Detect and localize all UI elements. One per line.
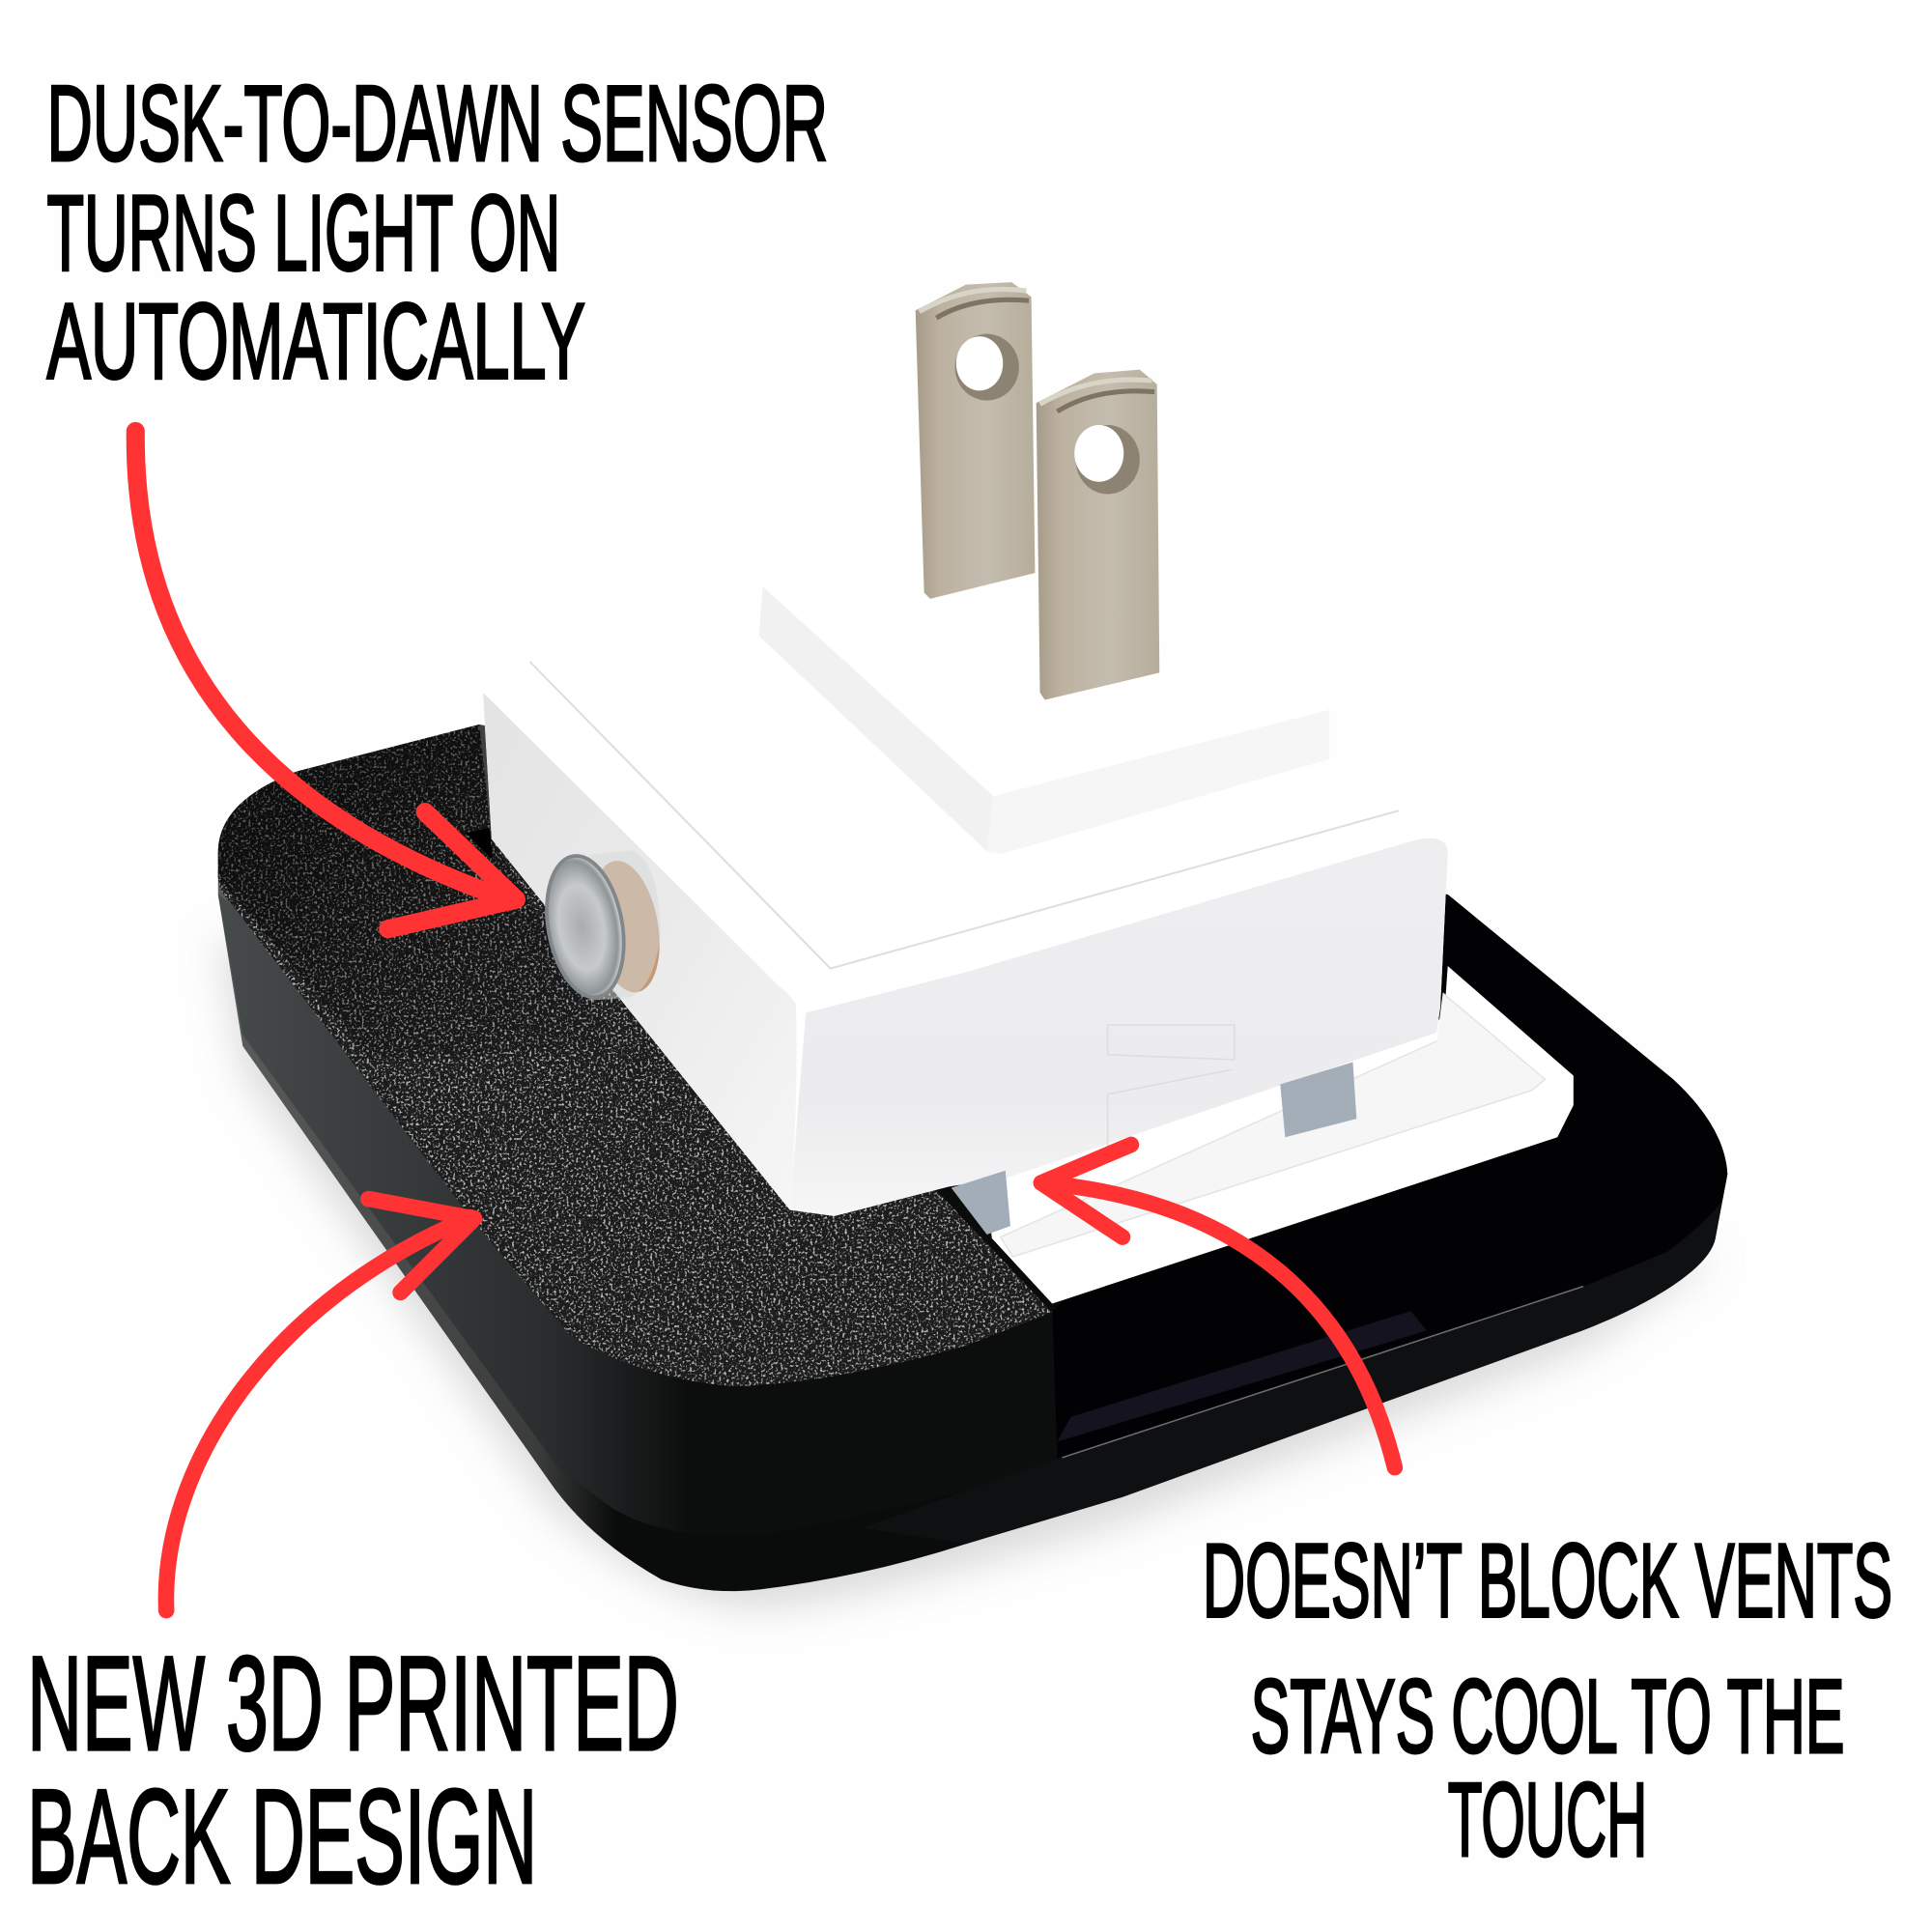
- gap shadow next to body: [466, 828, 493, 860]
- front prong: [1037, 370, 1159, 699]
- front prong hole: [1076, 425, 1140, 494]
- acrylic base plate: [218, 724, 1727, 1591]
- callout: new 3D printed back design: BACK DESIGN: [27, 1762, 537, 1912]
- arrow: sensor: [135, 431, 516, 929]
- acrylic front lip: [863, 1200, 1722, 1544]
- callout: vents and cool touch: [1203, 1521, 1892, 1878]
- body front right face: [790, 838, 1448, 1216]
- printed back textured top: [218, 724, 1052, 1386]
- front vent slot: [952, 1171, 1010, 1235]
- plug base top: [763, 577, 1329, 796]
- body silhouette underlay: [482, 589, 1448, 1216]
- white tray: [985, 966, 1574, 1303]
- product shadow: [218, 936, 1716, 1608]
- callout: dusk-to-dawn sensor: [46, 64, 828, 402]
- rear prong hole: [955, 334, 1019, 401]
- top face seam: [529, 662, 1399, 969]
- plug base: [759, 577, 1329, 854]
- sensor lens cap: [589, 850, 661, 1001]
- rear prong: [916, 282, 1035, 599]
- callout: new 3D printed back design: NEW 3D PRINTED: [27, 1629, 679, 1778]
- sensor lens: [536, 850, 634, 1004]
- callout: vents and cool touch: TOUCH: [1448, 1761, 1647, 1878]
- sensor lens copper: [582, 856, 669, 998]
- acrylic lip highlight: [1062, 1287, 1583, 1458]
- product photo: plug-in night light on base: [218, 282, 1727, 1591]
- arrow: back design: [166, 1199, 474, 1610]
- acrylic top surface: [1052, 895, 1727, 1459]
- embossed rectangle mark: [1108, 1025, 1235, 1146]
- callout: dusk-to-dawn sensor: DUSK-TO-DAWN SENSOR: [46, 64, 828, 184]
- callout: new 3D printed back design: [27, 1629, 679, 1912]
- callout: dusk-to-dawn sensor: AUTOMATICALLY: [46, 282, 585, 402]
- rear vent slot: [1280, 1062, 1356, 1137]
- plug base right side: [987, 710, 1329, 854]
- acrylic reflected strip: [1057, 1311, 1427, 1441]
- body left face: [483, 693, 797, 1210]
- tray inner recess: [1001, 993, 1545, 1257]
- plug base left side: [759, 586, 993, 851]
- arrow: vents: [1041, 1145, 1395, 1467]
- front prong top edge: [1040, 380, 1152, 404]
- dark shade on upper texture: [218, 724, 616, 1060]
- rear prong top edge: [920, 289, 1026, 312]
- callout: dusk-to-dawn sensor: TURNS LIGHT ON: [46, 173, 560, 293]
- printed back side wall: [218, 895, 1057, 1536]
